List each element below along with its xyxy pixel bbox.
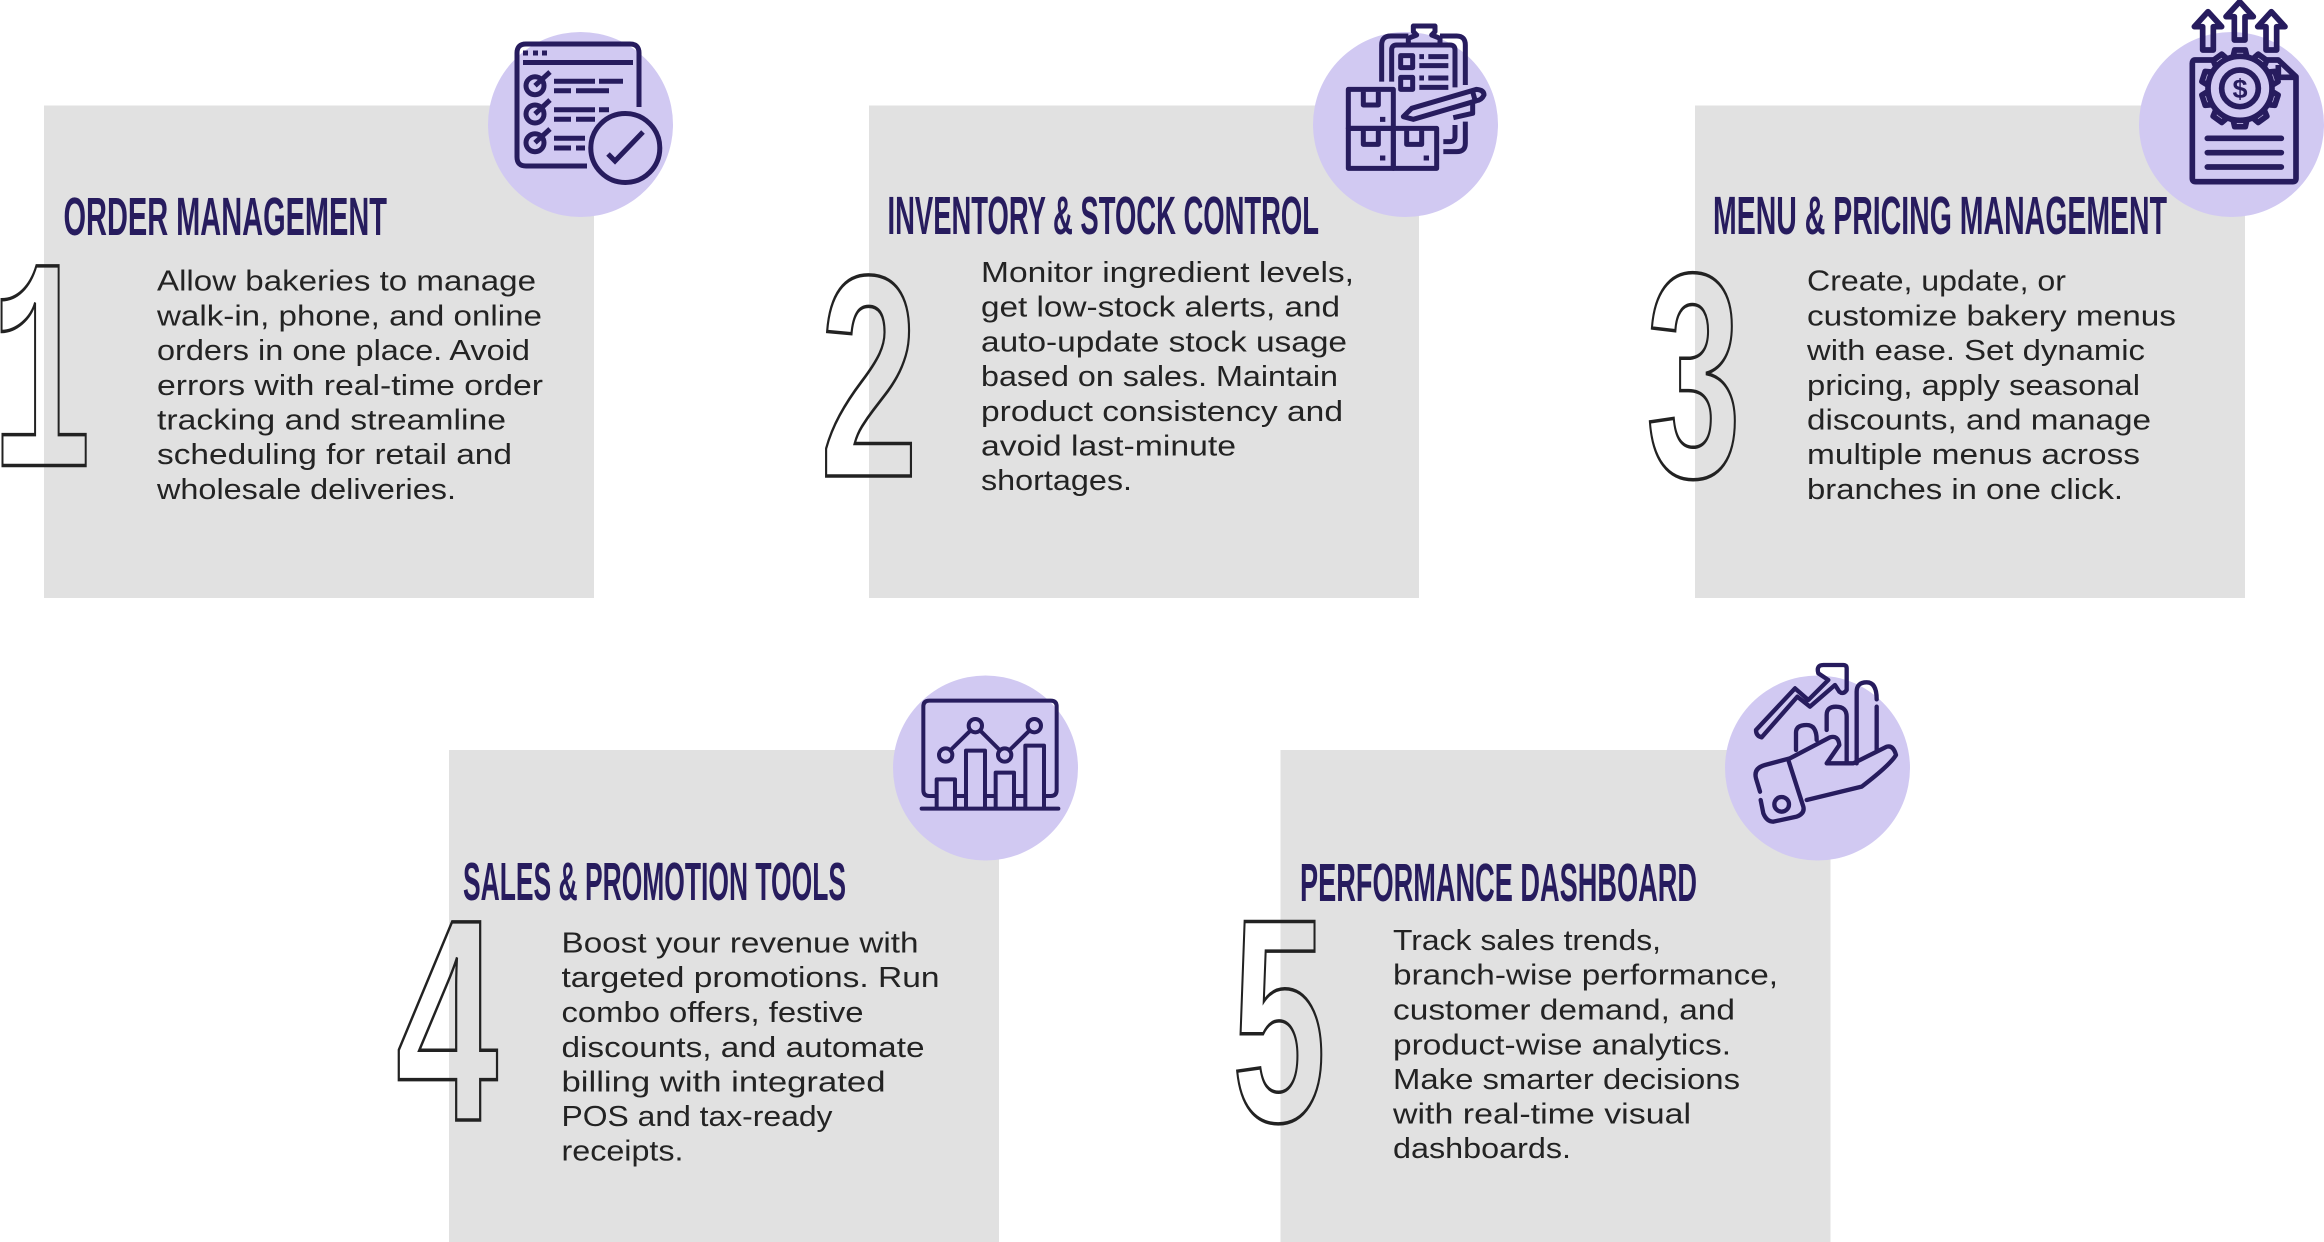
body text: targeted promotions. Run [562, 962, 940, 994]
step number 4: 4 [396, 860, 499, 1182]
body text: tracking and streamline [157, 405, 506, 437]
body text: Track sales trends, [1393, 925, 1661, 957]
panel background [1280, 750, 1830, 1242]
body text: scheduling for retail and [157, 439, 512, 471]
body text: multiple menus across [1807, 439, 2140, 471]
dollar sign: $ [2232, 74, 2248, 104]
panel: inventory and stock control [820, 26, 1498, 598]
icon badge: order checklist [488, 32, 673, 217]
heading: INVENTORY & STOCK CONTROL [888, 186, 1319, 246]
body text: orders in one place. Avoid [157, 335, 530, 367]
body text: errors with real-time order [157, 370, 544, 402]
body text: customer demand, and [1393, 994, 1735, 1026]
body text: pricing, apply seasonal [1807, 370, 2140, 402]
body text: product consistency and [981, 396, 1343, 428]
icon badge: hand with growth chart [1725, 665, 1910, 860]
step number 2: 2 [820, 216, 918, 538]
body text [1392, 925, 1778, 1165]
icon badge: monitor with chart [893, 676, 1078, 860]
body text: discounts, and automate [562, 1032, 924, 1064]
panel background [44, 106, 594, 598]
body text: Allow bakeries to manage [157, 266, 536, 298]
body text: branches in one click. [1807, 474, 2123, 506]
body text: dashboards. [1393, 1133, 1571, 1165]
body text: product-wise analytics. [1393, 1030, 1731, 1062]
body text: walk-in, phone, and online [156, 300, 542, 332]
body text: Boost your revenue with [562, 928, 918, 960]
body text: customize bakery menus [1807, 300, 2176, 332]
body text: Make smarter decisions [1393, 1064, 1740, 1096]
body text: Monitor ingredient levels, [981, 257, 1354, 289]
body text [1806, 266, 2176, 506]
panel: menu and pricing management [1646, 2, 2324, 598]
icon badge: pricing document with gear [2139, 2, 2324, 217]
body text: combo offers, festive [562, 997, 864, 1029]
body text: billing with integrated [562, 1066, 886, 1098]
body text [981, 257, 1354, 497]
body text: receipts. [562, 1136, 684, 1168]
body text: POS and tax-ready [562, 1101, 833, 1133]
body text: with real-time visual [1392, 1098, 1691, 1130]
body text: Create, update, or [1807, 266, 2067, 298]
step number 3: 3 [1646, 212, 1741, 538]
body text: wholesale deliveries. [156, 474, 456, 506]
body text: discounts, and manage [1807, 405, 2151, 437]
body text: avoid last-minute [981, 431, 1236, 463]
icon badge: inventory clipboard and boxes [1313, 26, 1498, 217]
body text [562, 928, 940, 1168]
heading: PERFORMANCE DASHBOARD [1300, 853, 1697, 913]
body text: get low-stock alerts, and [981, 292, 1340, 324]
body text: based on sales. Maintain [981, 361, 1338, 393]
panel background [449, 750, 999, 1242]
body text [156, 266, 544, 506]
body text: with ease. Set dynamic [1806, 335, 2145, 367]
panel: performance dashboard [1232, 665, 1910, 1242]
body text: auto-update stock usage [981, 326, 1347, 358]
panel: sales and promotion tools: SALES & PROMOTION TOOLS [463, 852, 846, 912]
panel background [1695, 106, 2245, 598]
body text: shortages. [981, 465, 1132, 497]
panel: sales and promotion tools [396, 676, 1078, 1242]
panel: order management [0, 32, 673, 598]
heading: ORDER MANAGEMENT [64, 187, 387, 247]
step number 5: 5 [1232, 859, 1326, 1183]
body text: branch-wise performance, [1393, 960, 1778, 992]
panel background [869, 106, 1419, 598]
